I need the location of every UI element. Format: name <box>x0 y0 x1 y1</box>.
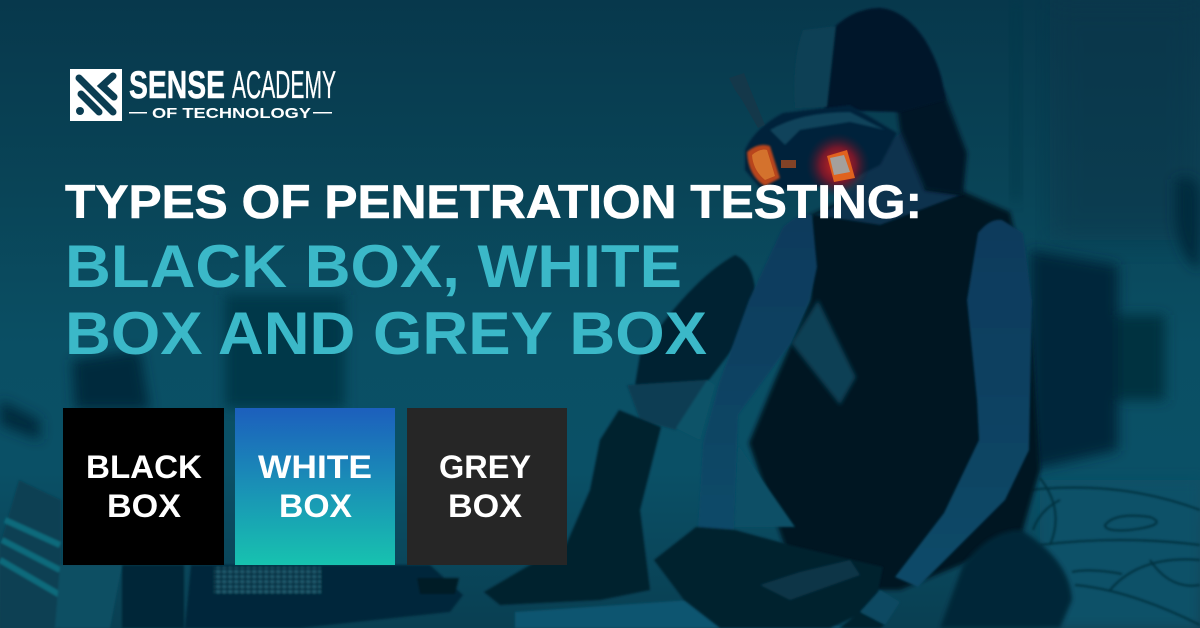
right arm <box>895 220 1032 587</box>
table edge <box>515 600 850 628</box>
panel: grey box: BOX <box>448 488 523 524</box>
title line 2: BLACK BOX, WHITE <box>65 233 682 300</box>
panel: grey box <box>407 408 567 565</box>
logo tagline: OF TECHNOLOGY <box>152 105 311 122</box>
panel: black box: BOX <box>107 488 182 524</box>
panel: white box: BOX <box>279 488 353 524</box>
antenna <box>729 73 765 128</box>
photo: person with cyber mask <box>484 8 1072 628</box>
title <box>65 175 922 367</box>
hood <box>825 8 945 112</box>
floor tone <box>1040 480 1200 628</box>
background equipment silhouettes <box>0 178 1200 470</box>
panel: grey box: GREY <box>439 449 531 485</box>
panel: black box: BLACK <box>86 449 202 485</box>
gap between arm and body <box>791 300 856 405</box>
panel: white box: WHITE <box>258 449 372 485</box>
photo: laptop and gear <box>0 480 463 628</box>
right knee <box>940 530 1072 628</box>
back leg and boot <box>484 255 756 605</box>
title line 3: BOX AND GREY BOX <box>65 300 707 367</box>
cables on the floor <box>0 478 1200 628</box>
torso and thigh <box>749 188 1040 590</box>
neck <box>815 128 960 225</box>
logo wordmark: SENSE <box>129 64 225 107</box>
logo wordmark second word: ACADEMY <box>232 64 336 107</box>
glove and boot at bottom <box>654 527 900 628</box>
mask <box>745 105 897 190</box>
panel: white box <box>235 408 395 565</box>
logo <box>70 64 336 122</box>
title line 1: TYPES OF PENETRATION TESTING: <box>65 175 922 228</box>
icon: logo mark <box>70 69 122 121</box>
hair <box>895 90 967 195</box>
hood panel <box>794 26 836 108</box>
gap between arm and thigh <box>734 445 795 527</box>
glowing lights <box>806 133 870 197</box>
left arm <box>698 214 817 530</box>
panel: black box <box>63 408 224 565</box>
